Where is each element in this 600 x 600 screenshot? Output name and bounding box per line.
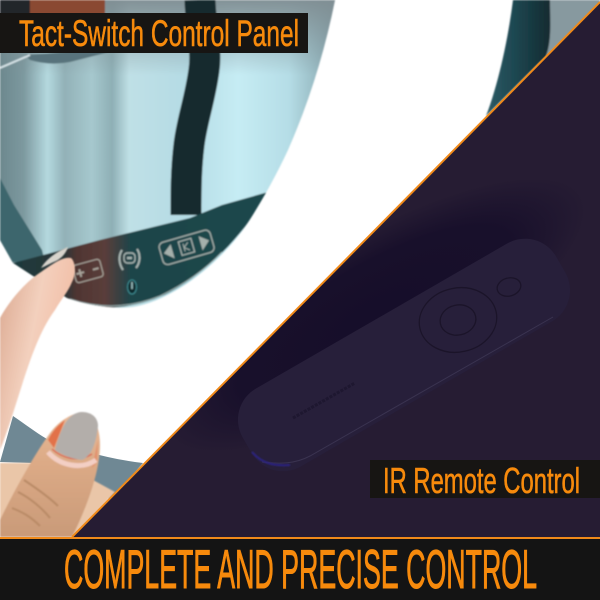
- footer banner: [0, 537, 600, 600]
- control panel: [13, 192, 268, 307]
- gooseneck arm: [186, 0, 205, 215]
- hand: [0, 247, 115, 537]
- backdrop below ring: [0, 416, 143, 500]
- icon: minus plus switch: [72, 259, 104, 283]
- nail thumb: [55, 412, 98, 460]
- label: tact-switch control panel: Tact-Switch Control Panel: [19, 13, 299, 54]
- palm: [0, 463, 115, 537]
- nail top: [41, 247, 68, 268]
- IR remote: [225, 226, 583, 484]
- mirror inside ring: [0, 0, 340, 320]
- thumb: [0, 412, 100, 537]
- remote small button: [495, 275, 523, 299]
- ring right backdrop: [486, 0, 600, 116]
- icon: power circle: [128, 280, 136, 294]
- icon: arrow keys: [158, 229, 215, 266]
- remote logo: [293, 383, 355, 418]
- label: tact-switch control panel: [0, 13, 308, 54]
- knuckle wrinkles: [12, 480, 58, 526]
- dark mat panel: [72, 2, 600, 537]
- pointing finger: [0, 247, 75, 450]
- remote shadow: [208, 206, 542, 424]
- remote dial: [413, 281, 503, 359]
- icon: light mode button: [119, 249, 140, 270]
- orange diagonal rule: [72, 2, 600, 537]
